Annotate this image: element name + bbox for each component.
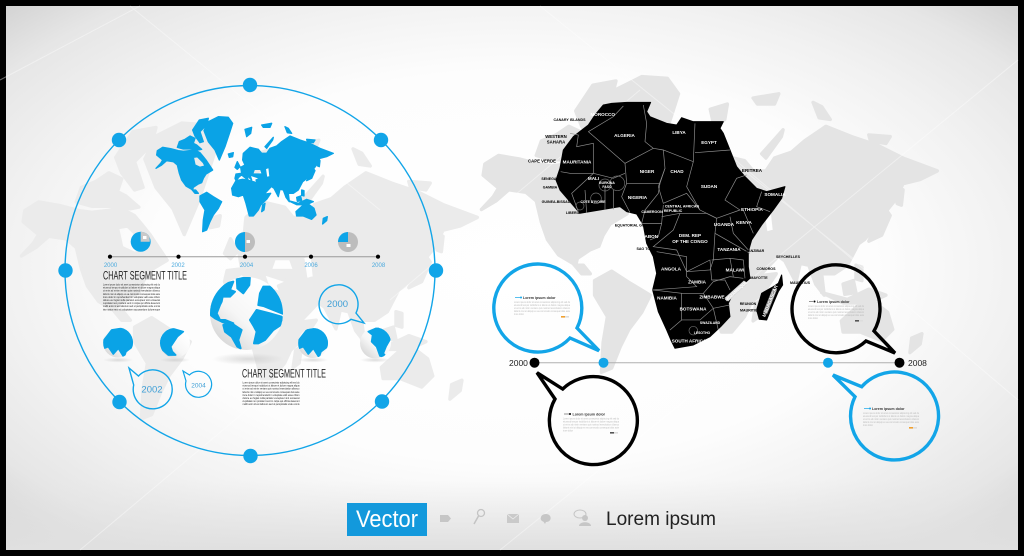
grey world map: right backdrop	[481, 77, 937, 372]
text block 1	[103, 282, 160, 311]
country labels: black outside Africa: LIBERIA	[566, 211, 581, 215]
ring outline	[65, 86, 435, 456]
large globe	[208, 276, 285, 365]
country labels: black outside Africa: SAO TOME	[636, 247, 656, 251]
timeline: 2000 to 2008: 2000	[509, 358, 528, 368]
country labels: white: GABON	[641, 234, 659, 239]
timeline: 2006	[304, 263, 318, 269]
country labels: white: ALGERIA	[614, 133, 636, 138]
country labels: white: ANGOLA	[661, 266, 682, 272]
callout: lower right blue: Lorem ipsum dolor sit amet consectetur adipiscing elit sed do	[863, 411, 919, 415]
callout: lower left black: Lorem ipsum dolor sit amet consectetur adipiscing elit sed do	[563, 416, 619, 420]
text block 1: irure dolor in reprehenderit in voluptate velit esse cillum	[103, 295, 160, 299]
callout: lower right blue: ut enim ad minim veniam quis nostrud exercitation ullamco	[863, 417, 919, 421]
text block 2: laboris nisi ut aliquip ex ea commodo consequat duis aute	[242, 390, 300, 394]
country labels: black outside Africa: SAHARA	[547, 140, 565, 144]
small globe 3	[298, 327, 329, 362]
icon: speech bubble	[541, 514, 551, 524]
country labels: black outside Africa: EQUATORIAL GUINEA	[615, 224, 654, 228]
text block 2	[242, 380, 300, 406]
callout: 2000: 2000	[327, 299, 348, 310]
country labels: black outside Africa: GAMBIA	[543, 186, 558, 190]
text block 2: dolore eu fugiat nulla pariatur excepteur sint occaecat	[242, 396, 300, 400]
pie chart 2006	[338, 232, 358, 252]
country labels: white: CAMEROON	[641, 210, 663, 214]
callout: lower left black: laboris nisi ut aliquip ex ea commodo consequat duis aute	[563, 426, 619, 430]
country labels: white	[563, 112, 786, 344]
country labels: white: EGYPT	[701, 140, 717, 145]
panel: global summary ring	[58, 78, 443, 463]
country labels: black outside Africa: SENEGAL	[541, 177, 559, 181]
grey world map: left backdrop	[21, 123, 477, 419]
callout: upper left blue	[494, 264, 599, 352]
text block 2: eiusmod tempor incididunt ut labore et dolore magna aliqua	[242, 384, 300, 388]
country labels: black outside Africa: COMOROS	[757, 267, 776, 271]
callout: lower right blue: irure dolor	[863, 423, 873, 427]
callout: upper left blue: ut enim ad minim veniam quis nostrud exercitation ullamco	[514, 306, 570, 310]
country labels: white: MAURITANIA	[563, 160, 592, 164]
country labels: white: COTE D'IVOIRE	[580, 200, 606, 204]
ring nodes	[58, 78, 443, 463]
country labels: white: KENYA	[736, 220, 753, 225]
country labels: white: DEM. REP	[679, 233, 701, 238]
text block 2: mollit anim id est laborum sed ut perspiciatis unde omnis	[242, 402, 300, 406]
country labels: white: ETHIOPIA	[741, 207, 764, 212]
callout: lower left black: eiusmod tempor incididunt ut labore et dolore magna aliqua	[563, 420, 619, 424]
callout: upper right black: ut enim ad minim veniam quis nostrud exercitation ullamco	[808, 310, 864, 314]
Madagascar label: MADAGASCAR	[761, 284, 779, 318]
icon: envelope	[507, 514, 519, 523]
country labels: white: ZAMBIA	[688, 280, 707, 284]
country labels: white: LIBYA	[672, 130, 686, 135]
heading: chart segment title 2: CHART SEGMENT TITLE	[242, 366, 326, 380]
small globe 1	[103, 327, 134, 362]
text block 2: cupidatat non proident sunt in culpa qui officia deserunt	[242, 399, 300, 403]
text block 1: dolore eu fugiat nulla pariatur excepteur sint occaecat	[103, 298, 160, 302]
country labels: white: TANZANIA	[717, 247, 741, 252]
country labels: white: REPUBLIC	[664, 209, 683, 213]
text block 1: laboris nisi ut aliquip ex ea commodo consequat duis aute	[103, 292, 160, 296]
callout: upper right black	[792, 265, 895, 353]
callout: upper right black: laboris nisi ut aliquip ex ea commodo consequat duis aute	[808, 313, 864, 317]
country labels: black outside Africa: MAURITIUS	[740, 308, 761, 312]
callout: lower left black: Lorem ipsum dolor	[572, 412, 606, 416]
text block 1: iste natus error sit voluptatem accusantium doloremque	[103, 307, 160, 311]
country labels: white: BOTSWANA	[680, 306, 707, 312]
label: Lorem ipsum: Lorem ipsum	[606, 508, 716, 530]
country labels: white: SUDAN	[701, 184, 718, 189]
country labels: black outside Africa: REUNION	[740, 302, 757, 306]
callout: lower right blue: eiusmod tempor incididunt ut labore et dolore magna aliqua	[863, 414, 919, 418]
country labels: white: SWAZILAND	[700, 321, 721, 325]
callout: upper left blue: Lorem ipsum dolor sit amet consectetur adipiscing elit sed do	[514, 300, 570, 304]
country labels: black outside Africa: GUINEA-BISSAU	[542, 200, 571, 204]
text block 1: Lorem ipsum dolor sit amet consectetur adipiscing elit sed do	[103, 282, 160, 286]
blue world map	[156, 117, 333, 232]
country labels: black outside Africa	[528, 118, 811, 312]
timeline: 2000 to 2008: 2008	[908, 358, 927, 368]
callout: upper right black: Lorem ipsum dolor sit amet consectetur adipiscing elit sed do	[808, 304, 864, 308]
text block 1: ut enim ad minim veniam quis nostrud exercitation ullamco	[103, 289, 160, 293]
icon: person with cloud	[574, 510, 591, 526]
callout: 2004: 2004	[191, 382, 206, 390]
timeline: 2000	[104, 263, 118, 269]
country labels: white: BURKINA	[599, 181, 615, 185]
text block 1: mollit anim id est laborum sed ut perspiciatis unde omnis	[103, 304, 160, 308]
text block 1: eiusmod tempor incididunt ut labore et dolore magna aliqua	[103, 286, 160, 290]
callout: lower right blue	[833, 372, 939, 460]
callout: upper right black: Lorem ipsum dolor	[817, 300, 850, 304]
callout: upper left blue: irure dolor	[514, 312, 524, 316]
country labels: white: SOMALIA	[764, 192, 786, 197]
country labels: white: SOUTH AFRICA	[672, 338, 707, 344]
icon: magnifier	[474, 510, 484, 524]
callout: 2002: 2002	[141, 384, 163, 396]
country labels: black outside Africa: ZANZIBAR	[746, 249, 765, 253]
timeline: 2004	[240, 263, 254, 269]
callout: lower left black: irure dolor	[563, 428, 573, 432]
country labels: white: MALAWI	[726, 268, 744, 272]
callout: 2002	[129, 368, 172, 409]
badge: Vector: Vector	[356, 506, 418, 533]
heading: chart segment title 1: CHART SEGMENT TITLE	[103, 268, 187, 282]
timeline: 2002	[171, 263, 185, 269]
country labels: white: NIGERIA	[628, 195, 648, 200]
small globe 4	[360, 327, 391, 362]
text block 2: irure dolor in reprehenderit in voluptate velit esse cillum	[242, 393, 300, 397]
country labels: white: LESOTHO	[694, 331, 711, 335]
country labels: white: UGANDA	[714, 222, 735, 227]
small globe 2	[159, 328, 190, 362]
callout: upper right black: irure dolor	[808, 316, 818, 320]
timeline: 2000 to 2008	[509, 358, 927, 368]
country labels: white: CHAD	[670, 169, 684, 174]
text block 1: cupidatat non proident sunt in culpa qui officia deserunt	[103, 301, 160, 305]
callout: 2004	[183, 371, 212, 397]
country labels: black outside Africa: CAPE VERDE	[528, 158, 556, 164]
callout: upper left blue: Lorem ipsum dolor	[523, 296, 556, 300]
callout: upper left blue: laboris nisi ut aliquip ex ea commodo consequat duis aute	[514, 309, 570, 313]
country labels: white: FASO	[602, 185, 612, 189]
callout: lower left black: ut enim ad minim veniam quis nostrud exercitation ullamco	[563, 422, 619, 426]
timeline: 2008	[372, 263, 386, 269]
country labels: white: MOROCCO	[590, 112, 615, 117]
badge: Vector	[347, 503, 427, 536]
map: Africa with country borders	[528, 102, 811, 348]
text block 2: Lorem ipsum dolor sit amet consectetur adipiscing elit sed do	[242, 380, 300, 384]
country labels: white: OF THE CONGO	[672, 239, 708, 244]
country labels: black outside Africa: MAYOTTE	[750, 276, 768, 280]
country labels: black outside Africa: ERITREA	[742, 168, 763, 173]
callout: 2000	[319, 285, 364, 324]
country labels: black outside Africa: SEYCHELLES	[776, 255, 801, 259]
icon: video	[440, 515, 451, 522]
callout: lower right blue: laboris nisi ut aliquip ex ea commodo consequat duis aute	[863, 420, 919, 424]
callout: lower right blue: Lorem ipsum dolor	[872, 407, 905, 411]
country labels: black outside Africa: CANARY ISLANDS	[554, 118, 586, 122]
pie chart 2004	[235, 232, 255, 252]
country labels: white: MALI	[588, 176, 599, 181]
country labels: white: CENTRAL AFRICAN	[665, 204, 699, 208]
country labels: black outside Africa: WESTERN	[545, 134, 567, 139]
footer bar	[347, 503, 716, 536]
callout: upper right black: eiusmod tempor incididunt ut labore et dolore magna aliqua	[808, 307, 864, 311]
timeline	[104, 255, 386, 269]
country labels: white: NAMIBIA	[657, 296, 678, 300]
country labels: black outside Africa: MAURITIUS	[790, 281, 811, 285]
text block 2: ut enim ad minim veniam quis nostrud exercitation ullamco	[242, 387, 300, 391]
country labels: white: NIGER	[640, 169, 655, 174]
country labels: white: ZIMBABWE	[699, 294, 725, 300]
callout: upper left blue: eiusmod tempor incididunt ut labore et dolore magna aliqua	[514, 303, 570, 307]
Mozambique label strip: MOZAMBIQUE	[724, 280, 748, 302]
callout: lower left black	[537, 373, 637, 465]
pie chart 2000	[131, 232, 151, 252]
